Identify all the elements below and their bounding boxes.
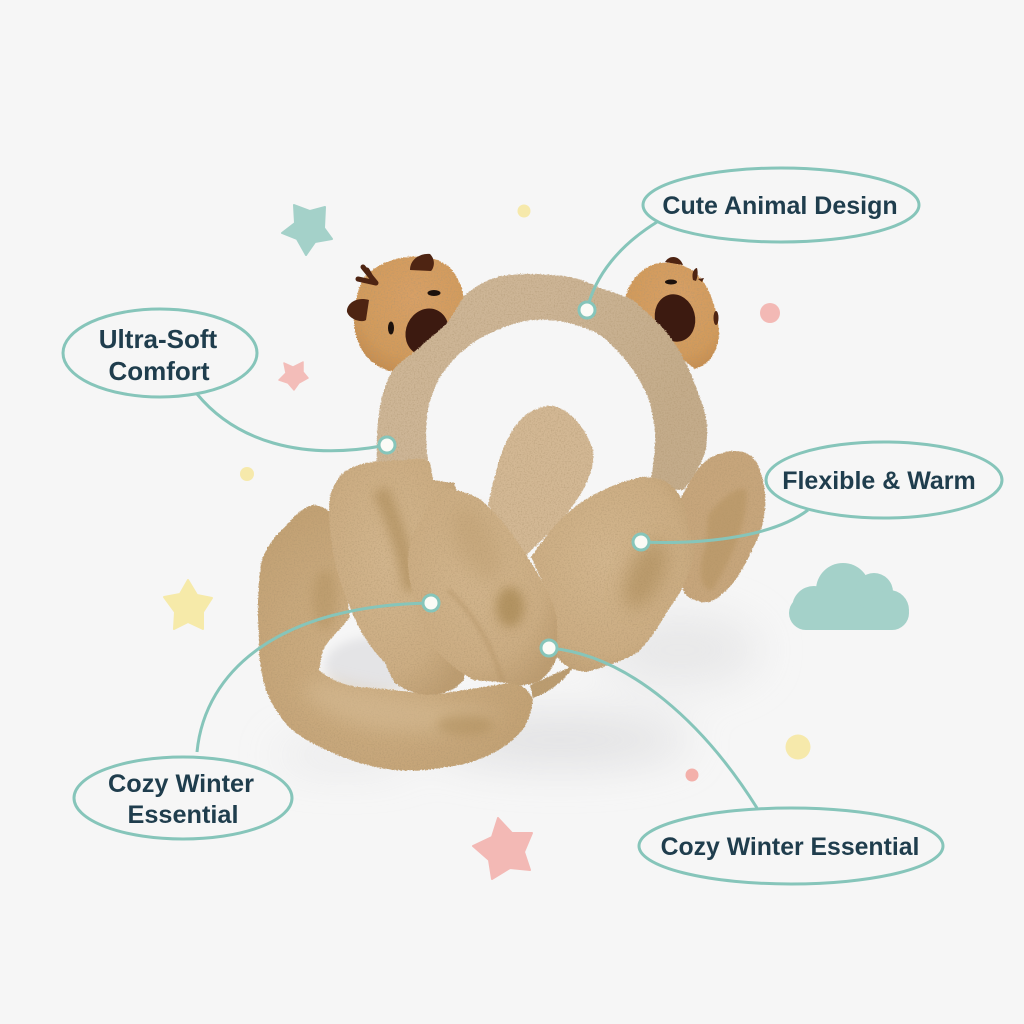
callout dots (379, 302, 649, 656)
callout: Cozy Winter Essential left (74, 757, 292, 839)
callout: Cozy Winter Essential right (639, 808, 943, 884)
eyes (428, 290, 440, 296)
callout: Cozy Winter Essential left: Essential (127, 801, 239, 829)
left capybara head (347, 254, 465, 372)
star: yellow (164, 580, 212, 629)
decorative stars and dots (164, 204, 909, 879)
star: large pink (473, 818, 532, 879)
left outer pad crease shadow (380, 490, 412, 590)
muzzle (398, 301, 456, 363)
lower strap highlight (300, 680, 505, 732)
antlers (358, 267, 376, 283)
right ear pad (531, 477, 695, 672)
callout connector lines (197, 222, 808, 808)
dot: yellow bottom (786, 734, 810, 760)
strap side shadow (313, 570, 337, 630)
inner pad upper shading (441, 500, 511, 590)
headband (376, 274, 707, 490)
dot: yellow left (240, 467, 254, 481)
callout: Cute Animal Design: Cute Animal Design (662, 192, 898, 220)
strap fur shadow (437, 715, 493, 735)
eye (665, 280, 677, 284)
back strap loop (258, 505, 533, 771)
callout: Ultra-Soft Comfort: Ultra-Soft (99, 324, 218, 354)
callout: Flexible & Warm (766, 442, 1002, 518)
flap inner fold (701, 489, 747, 590)
inner pad fur shadow (496, 587, 524, 627)
ears and antlers (665, 257, 683, 265)
callout: Ultra-Soft Comfort: Comfort (108, 356, 210, 386)
muzzle (649, 290, 701, 346)
callout: Cozy Winter Essential left: Cozy Winter (108, 770, 254, 798)
star: teal (282, 205, 332, 255)
hole shade behind strap (325, 637, 425, 693)
dot: yellow top (518, 204, 530, 218)
right pad fur shadow (614, 535, 676, 615)
dot: pink bottom (686, 768, 698, 782)
callout: Cozy Winter Essential right: Cozy Winter Essential (661, 834, 919, 861)
right rabbit-like ear flap (680, 451, 765, 602)
small tail under pads (530, 665, 575, 698)
left outer ear pad (329, 459, 466, 695)
head side ear (347, 299, 369, 321)
product: plush earmuffs (258, 254, 765, 771)
icon: cloud (789, 563, 909, 630)
inner pad seam (448, 590, 503, 682)
callout: Flexible & Warm: Flexible & Warm (782, 467, 976, 495)
callout: Cute Animal Design (643, 168, 919, 242)
back ear flap (488, 406, 593, 556)
dot: pink right (760, 303, 780, 323)
ground shadow (275, 614, 760, 767)
left inner ear pad (408, 488, 557, 685)
right capybara head (625, 257, 719, 369)
callout: Ultra-Soft Comfort (63, 309, 257, 397)
head top ear (410, 254, 434, 271)
star: small pink (279, 362, 308, 390)
